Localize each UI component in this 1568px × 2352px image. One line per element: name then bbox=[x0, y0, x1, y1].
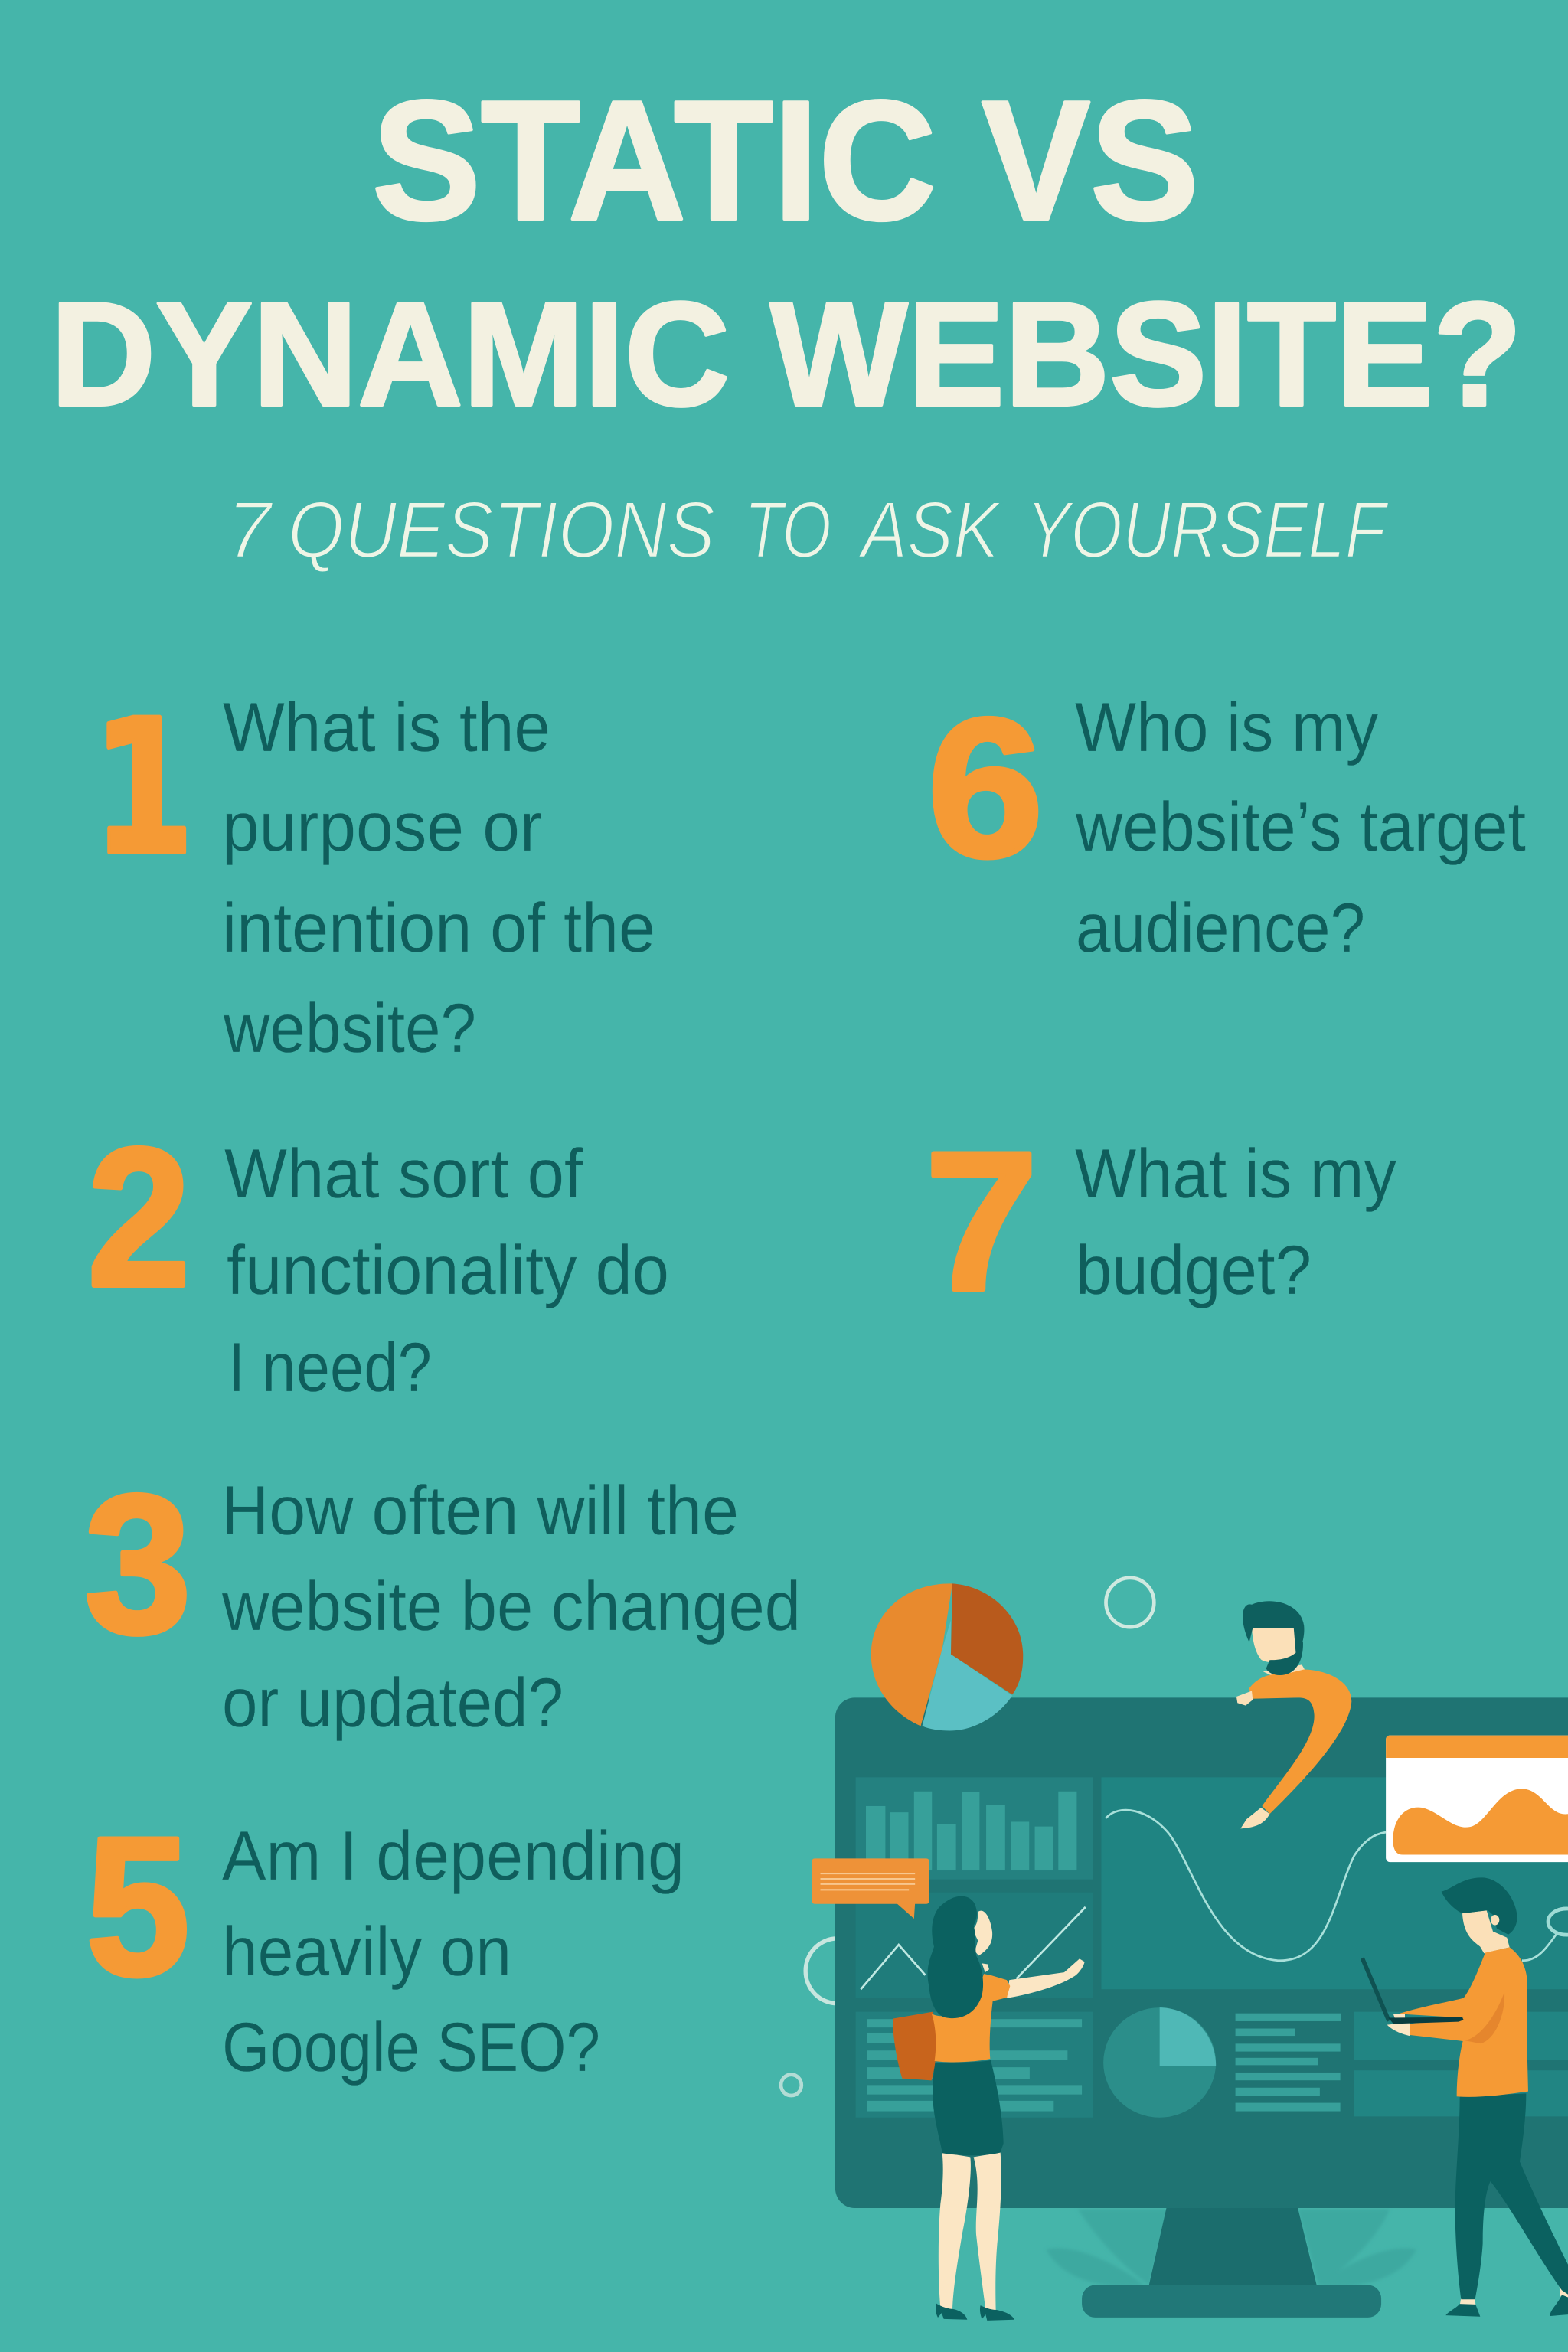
question 1 text: purpose or bbox=[222, 789, 542, 866]
woman arm bbox=[1007, 1958, 1085, 1998]
woman bag bbox=[893, 2012, 936, 2080]
subtitle: QUESTIONS bbox=[288, 485, 715, 575]
number 7: 7 bbox=[925, 1110, 1038, 1331]
number 3: 3 bbox=[84, 1453, 191, 1674]
subtitle: TO bbox=[744, 485, 831, 575]
monitor stand bbox=[1082, 2204, 1381, 2318]
title: DYNAMIC WEBSITE? bbox=[51, 271, 1522, 436]
subtitle: 7 bbox=[227, 485, 274, 575]
subtitle: ASK bbox=[858, 485, 1001, 575]
bar chart bbox=[866, 1792, 1076, 1870]
number 6: 6 bbox=[927, 677, 1044, 898]
dashboard panels bbox=[856, 1777, 1568, 2118]
question 3 bbox=[84, 1453, 801, 1742]
man face and neck bbox=[1462, 1910, 1510, 1953]
question 6 text: website’s target bbox=[1075, 789, 1526, 866]
question 1 text: website? bbox=[223, 990, 476, 1067]
woman shoes bbox=[936, 2303, 1014, 2321]
question 2 text bbox=[224, 1135, 669, 1406]
question 6 bbox=[927, 677, 1526, 967]
question 5 text: Am I depending bbox=[222, 1818, 684, 1895]
question 1 text bbox=[222, 689, 655, 1067]
plants behind stand bbox=[1046, 2209, 1416, 2286]
area chart card bbox=[1386, 1736, 1568, 1961]
question 3 text: How often will the bbox=[221, 1472, 739, 1550]
man with laptop bbox=[1362, 1877, 1568, 2317]
question 6 text bbox=[1075, 689, 1526, 967]
subtitle bbox=[227, 485, 1390, 575]
question 6 text: audience? bbox=[1076, 890, 1365, 967]
title bbox=[51, 66, 1522, 436]
decorative circles bbox=[781, 1578, 1154, 2096]
monitor body bbox=[835, 1697, 1568, 2208]
woman top bbox=[932, 1974, 1010, 2063]
question 3 text bbox=[221, 1472, 801, 1742]
question 3 text: website be changed bbox=[221, 1568, 801, 1645]
question 1 bbox=[92, 681, 655, 1067]
question 2 bbox=[87, 1106, 669, 1406]
wave line chart bbox=[1106, 1810, 1386, 1961]
woman neck bbox=[982, 1963, 989, 1972]
question 5 text: Google SEO? bbox=[222, 2009, 600, 2086]
subtitle: YOURSELF bbox=[1026, 485, 1390, 575]
question 7 text bbox=[1075, 1135, 1396, 1309]
man shoes bbox=[1446, 2295, 1568, 2317]
line chart bbox=[861, 1907, 1086, 1989]
woman face bbox=[973, 1911, 992, 1955]
man leaning over monitor bbox=[1236, 1601, 1351, 1828]
number 2: 2 bbox=[87, 1106, 191, 1328]
question 7 text: What is my bbox=[1075, 1135, 1396, 1213]
number 5: 5 bbox=[86, 1795, 190, 2017]
number 1: 1 bbox=[92, 681, 194, 897]
man hair bbox=[1442, 1877, 1517, 1935]
question 1 text: intention of the bbox=[222, 890, 655, 967]
lower left list lines bbox=[867, 2019, 1082, 2112]
question 6 text: Who is my bbox=[1075, 689, 1378, 766]
question 5 bbox=[86, 1795, 684, 2086]
man sweater bbox=[1399, 1947, 1528, 2097]
question 2 text: functionality do bbox=[227, 1232, 669, 1309]
man pants bbox=[1455, 2093, 1568, 2299]
question 5 text: heavily on bbox=[222, 1913, 511, 1991]
man hands bbox=[1387, 2014, 1410, 2036]
woman legs bbox=[939, 2152, 1001, 2310]
question 5 text bbox=[222, 1818, 684, 2086]
speech bubble bbox=[812, 1858, 929, 1919]
question 1 text: What is the bbox=[223, 689, 550, 766]
question 3 text: or updated? bbox=[222, 1664, 564, 1742]
man ankles bbox=[1460, 2287, 1568, 2305]
illustration: people analysing a dashboard monitor bbox=[781, 1578, 1568, 2321]
pie chart on screen bbox=[1103, 2007, 1216, 2118]
question 2 text: What sort of bbox=[224, 1135, 583, 1213]
woman hair bbox=[928, 1896, 983, 2018]
dashboard scene bbox=[781, 1578, 1568, 2318]
sleeve shading bbox=[1465, 1992, 1504, 2043]
man ear bbox=[1491, 1915, 1499, 1926]
question 2 text: I need? bbox=[228, 1329, 432, 1406]
question 7 text: budget? bbox=[1076, 1232, 1312, 1309]
floating pie chart bbox=[871, 1583, 1023, 1730]
woman pointing at chart bbox=[893, 1896, 1085, 2321]
centre list lines bbox=[1236, 2014, 1341, 2112]
laptop bbox=[1362, 1958, 1464, 2024]
woman skirt bbox=[933, 2060, 1004, 2155]
question 7 bbox=[925, 1110, 1396, 1331]
title: STATIC VS bbox=[372, 66, 1199, 256]
